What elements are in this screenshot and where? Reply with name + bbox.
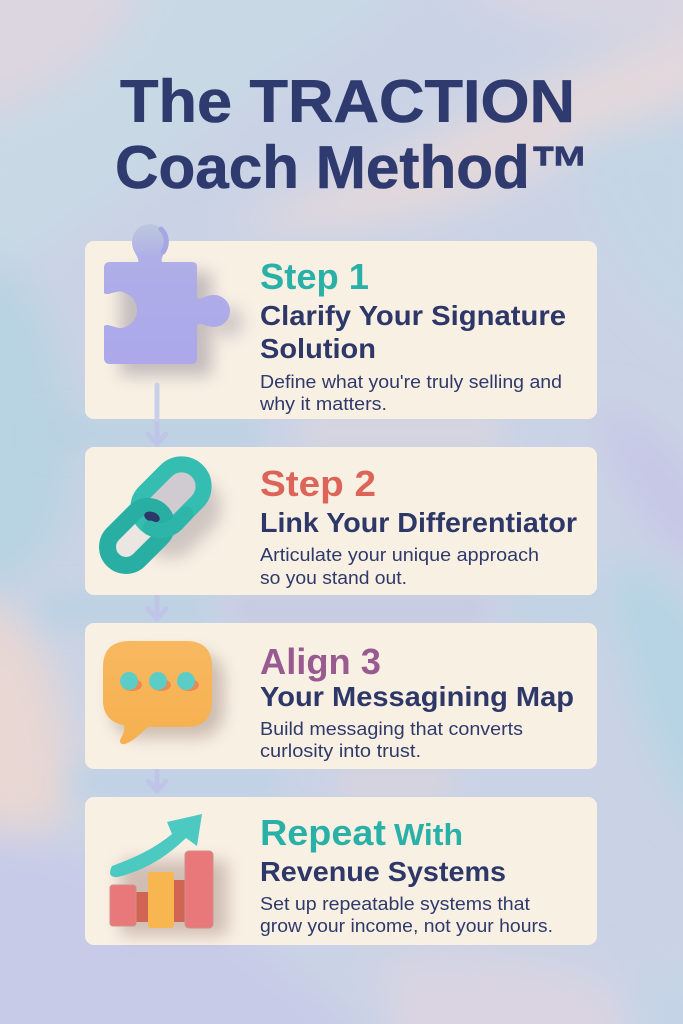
description: step 1: Define what you're truly selling and (260, 371, 562, 392)
description: step 4: grow your income, not your hours. (260, 915, 553, 936)
description: step 3: curlosity into trust. (260, 740, 421, 761)
description: step 2: so you stand out. (260, 567, 407, 588)
title (115, 68, 590, 201)
panel: step 2 (85, 447, 597, 595)
icon: puzzle piece (104, 224, 244, 376)
panel: step 3 (85, 623, 597, 769)
description: step 4 (260, 893, 553, 936)
panel: step 1 (85, 224, 597, 419)
description: step 4: Set up repeatable systems that (260, 893, 530, 914)
title: Coach Method™ (115, 134, 590, 201)
description: step 1 (259, 371, 562, 414)
heading: step 3: Align 3 (260, 641, 381, 682)
arrow: step 2 to 3 (148, 596, 166, 619)
subheading: step 1: Clarify Your Signature (260, 300, 566, 331)
description: step 1: why it matters. (259, 393, 387, 414)
subheading: step 3: Your Messagining Map (260, 681, 574, 712)
icon: speech bubble (103, 641, 224, 744)
heading: step 4: With (394, 817, 463, 852)
description: step 3 (260, 718, 523, 761)
arrow: step 3 to 4 (148, 770, 166, 791)
subheading: step 4: Revenue Systems (260, 856, 506, 887)
icon: chain link (100, 455, 234, 573)
subheading: step 1 (260, 300, 566, 364)
description: step 2 (260, 544, 539, 588)
title: The TRACTION (120, 68, 575, 135)
panel: step 4 (85, 797, 597, 945)
description: step 2: Articulate your unique approach (260, 544, 539, 565)
heading: step 2: Step 2 (260, 463, 376, 504)
subheading: step 2: Link Your Differentiator (260, 507, 577, 538)
heading: step 4: Repeat (260, 812, 386, 853)
subheading: step 1: Solution (260, 333, 376, 364)
arrow stem inside card (154, 385, 160, 419)
heading: step 1: Step 1 (260, 256, 369, 297)
description: step 3: Build messaging that converts (260, 718, 523, 739)
heading: step 4 (260, 812, 463, 853)
arrow: step 1 to 2 (148, 385, 166, 444)
gaps between cards: bands (40, 415, 610, 801)
icon: growth chart (110, 814, 228, 936)
dots (120, 672, 199, 691)
arrow up (110, 814, 202, 877)
